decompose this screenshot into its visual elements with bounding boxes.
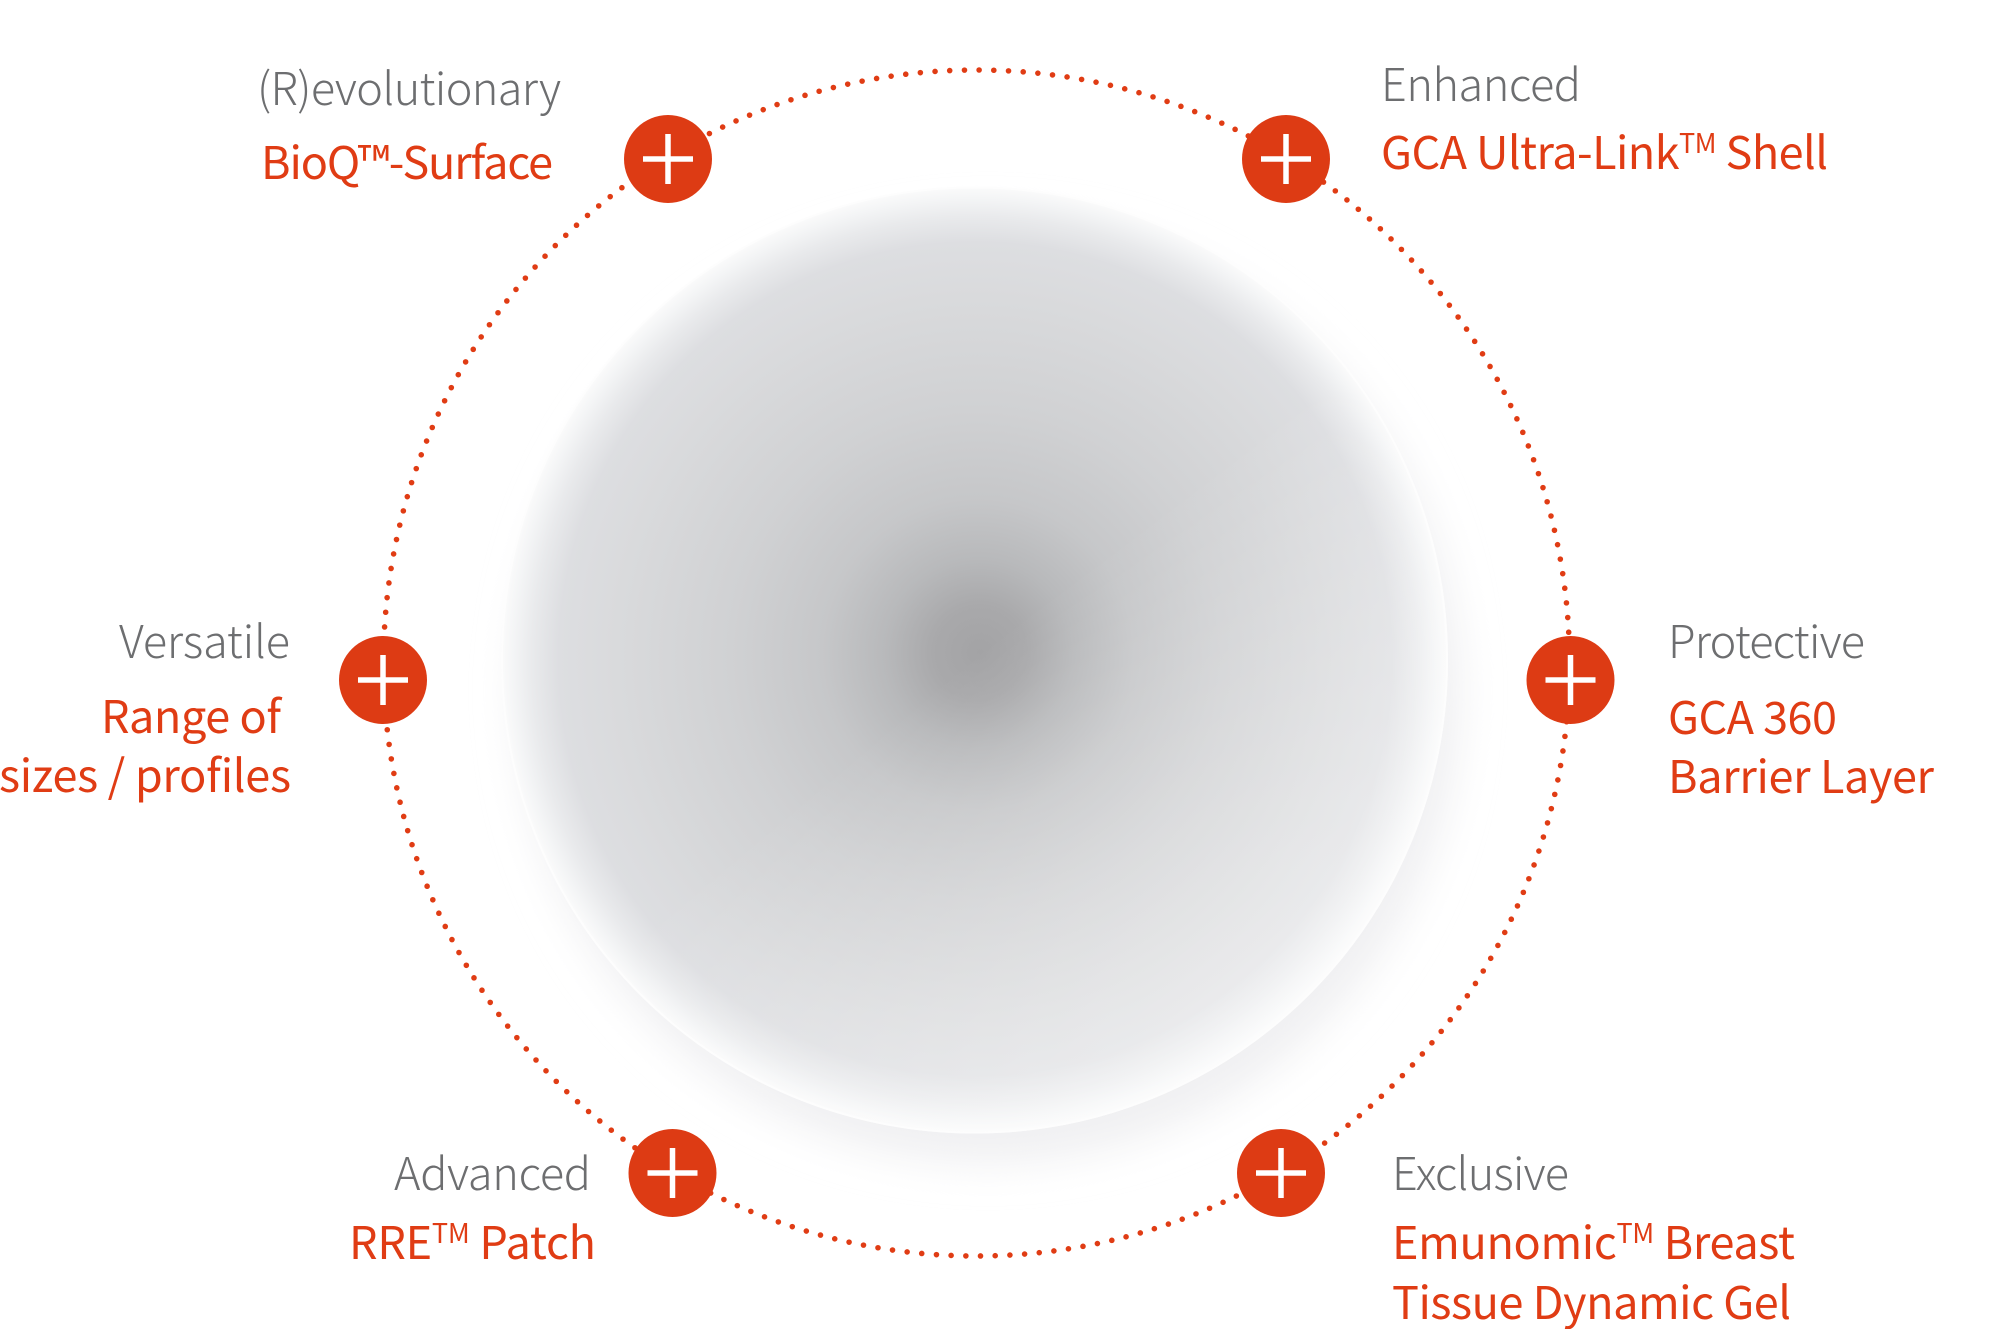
icon: plus bottom right [1237,1129,1325,1217]
label: advanced rre patch: Advanced [394,1138,591,1203]
label: versatile range of sizes and profiles: sizes / profiles [0,740,291,805]
label: revolutionary bioq surface: BioQ™-Surface [261,127,553,192]
sphere shadow [516,219,1460,1163]
label: enhanced gca ultra-link shell: Enhanced [1381,49,1581,114]
label: protective gca 360 barrier layer: GCA 360 [1668,682,1837,747]
label: revolutionary bioq surface: (R)evolutionary [257,53,561,118]
label: advanced rre patch: TM [432,1212,470,1251]
label: revolutionary bioq surface [257,53,561,192]
label: exclusive emunomic breast tissue dynamic gel: Exclusive [1392,1138,1569,1203]
label: enhanced gca ultra-link shell: GCA Ultra-Link [1381,117,1680,182]
label: protective gca 360 barrier layer: Barrier Layer [1668,741,1935,806]
label: enhanced gca ultra-link shell: Shell [1716,117,1828,182]
label: versatile range of sizes and profiles: Versatile [119,606,290,671]
dotted ring [384,70,1570,1256]
central sphere [501,186,1448,1134]
icon: plus top right [1242,115,1330,203]
label: exclusive emunomic breast tissue dynamic gel: Emunomic [1392,1207,1617,1272]
label: enhanced gca ultra-link shell: TM [1679,122,1717,161]
label: exclusive emunomic breast tissue dynamic gel [1392,1138,1795,1329]
label: protective gca 360 barrier layer [1668,606,1935,806]
label: protective gca 360 barrier layer: Protective [1668,606,1865,671]
icon: plus top left [624,115,712,203]
label: advanced rre patch: Patch [470,1207,596,1272]
icon: plus bottom left [628,1129,716,1217]
label: enhanced gca ultra-link shell [1381,49,1828,182]
label: versatile range of sizes and profiles: Range of [101,681,283,746]
label: advanced rre patch [349,1138,596,1272]
icon: plus right [1526,636,1614,724]
label: exclusive emunomic breast tissue dynamic gel: Breast [1654,1207,1795,1272]
label: versatile range of sizes and profiles [0,606,291,805]
label: exclusive emunomic breast tissue dynamic gel: TM [1616,1212,1654,1251]
icon: plus left [339,636,427,724]
label: advanced rre patch: RRE [349,1207,432,1272]
